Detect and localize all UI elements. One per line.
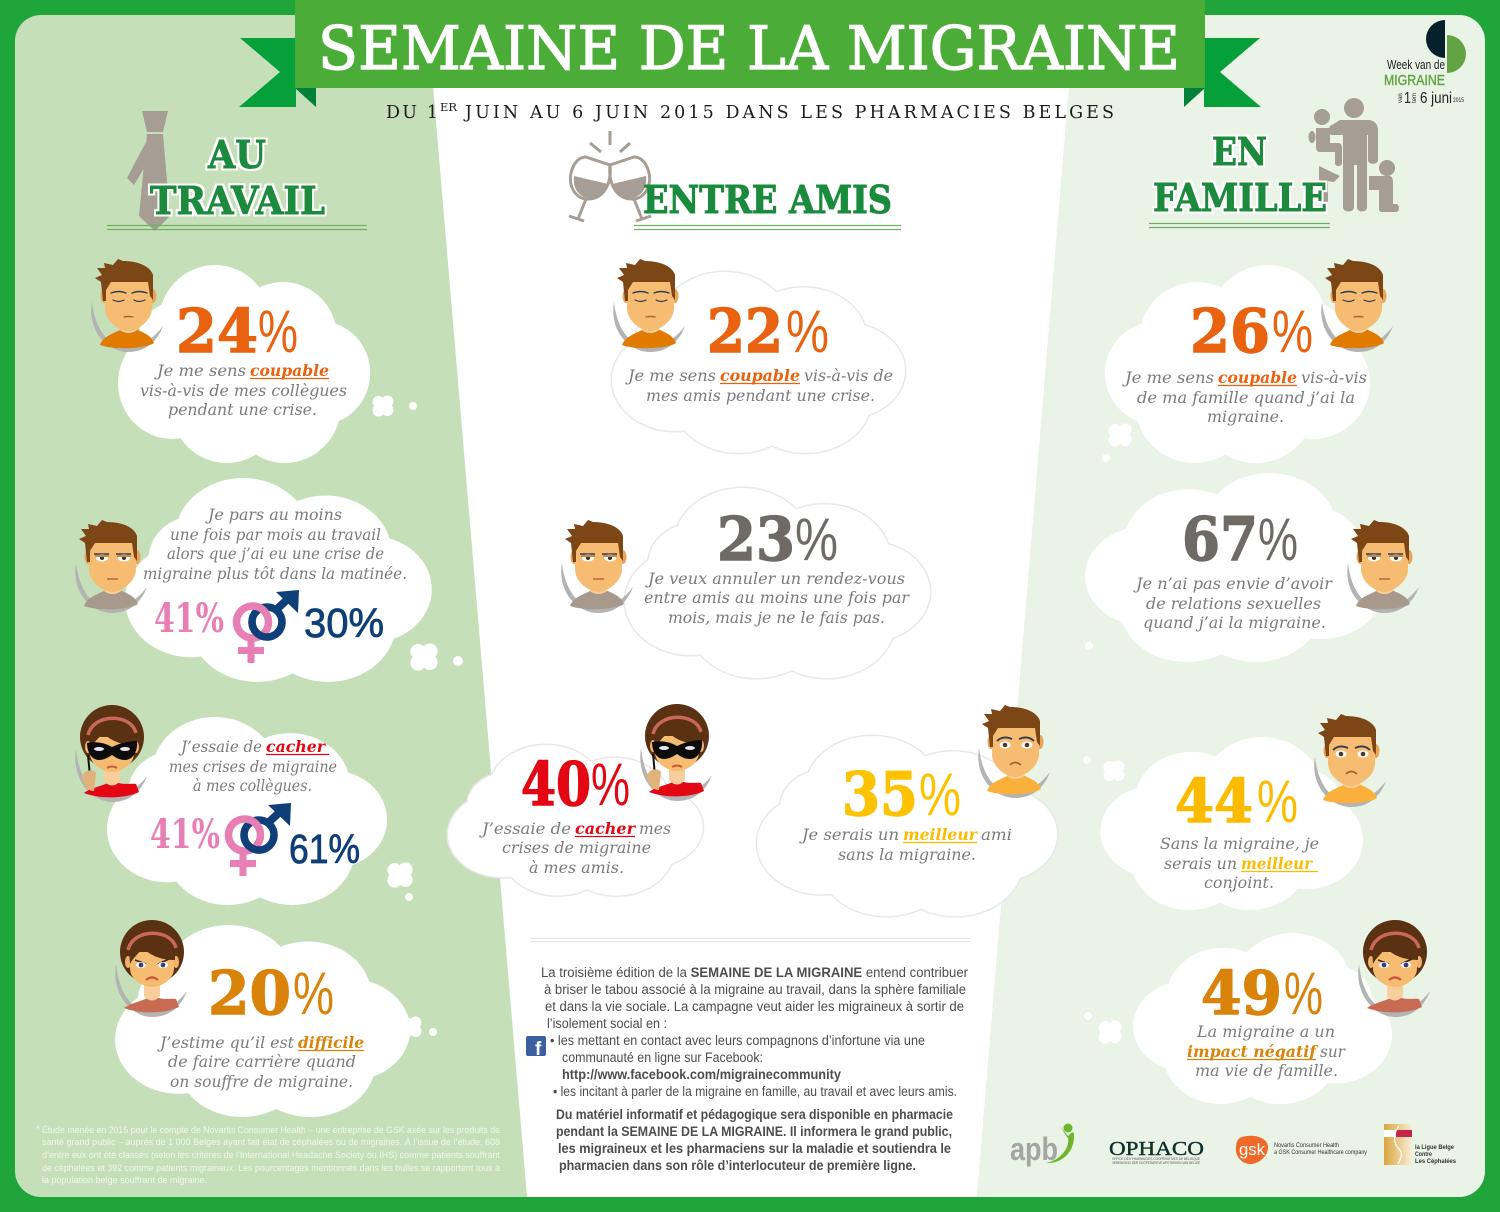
- bubble: 24% coupable collègues: coupable: [250, 361, 329, 380]
- bubble: 44% meilleur conjoint: 44: [1175, 767, 1253, 837]
- icon: facebook: f: [535, 1039, 542, 1060]
- bubble: 40% cacher amis: J’essaie de: [479, 819, 571, 838]
- icon: wine glasses: [569, 131, 651, 221]
- bubble: 40% cacher amis: [448, 704, 712, 895]
- logo: week van de migraine: van: [1398, 93, 1404, 103]
- bubble: 44% meilleur conjoint: %: [1257, 768, 1298, 835]
- heading: en famille: EN: [1212, 129, 1267, 174]
- bubble: 35% meilleur ami: [757, 705, 1057, 916]
- bubble: 35% meilleur ami: sans la migraine.: [838, 845, 976, 864]
- bubble: 44% meilleur conjoint: [1083, 714, 1386, 910]
- bubble: 23% annuler rendez-vous: 23: [717, 505, 795, 575]
- bubble: 23% annuler rendez-vous: mois, mais je ne le fais pas.: [668, 608, 885, 627]
- bubble: 49% impact négatif: La migraine a un: [1196, 1022, 1335, 1041]
- bubble: 26% coupable famille: [1102, 259, 1393, 463]
- text block: campaign description: l’isolement social en :: [547, 1016, 667, 1031]
- bubble: j'essaie de cacher collègues 41% 61%: mes crises de migraine: [169, 757, 337, 776]
- bubble: j'essaie de cacher collègues 41% 61%: [75, 705, 413, 905]
- bubble: 24% coupable collègues: vis-à-vis de mes collègues: [140, 381, 347, 400]
- footnote: *: [36, 1124, 40, 1135]
- text block: campaign description: • les mettant en contact avec leurs compagnons d’infortune via une: [550, 1033, 925, 1048]
- bubble: 22% coupable amis: coupable: [720, 366, 800, 385]
- heading: au travail: [107, 132, 367, 230]
- logo: gsk novartis: [1236, 1136, 1367, 1164]
- subtitle dates: ER: [440, 101, 458, 114]
- logo: la ligue belge contre les céphalées: la Ligue Belge: [1415, 1145, 1455, 1151]
- bubble: 20% difficile carrière: 20: [208, 959, 291, 1029]
- bubble: 44% meilleur conjoint: Sans la migraine, je: [1160, 834, 1319, 853]
- bubble: 22% coupable amis: [612, 259, 905, 453]
- logo: ophaco: OPHACO: [1109, 1138, 1204, 1160]
- bubble: 40% cacher amis: %: [591, 751, 630, 818]
- text block: campaign description: http://www.facebook.com/migrainecommunity: [562, 1067, 841, 1082]
- bubble: 20% difficile carrière: de faire carrière quand: [168, 1052, 356, 1071]
- bubble: je pars au travail 41% 30%: une fois par mois au travail: [170, 525, 381, 544]
- logo: ophaco: OFFICE DES PHARMACIES COOPÉRATIVES DE BELGIQUE: [1112, 1156, 1201, 1161]
- bubble: 20% difficile carrière: on souffre de migraine.: [170, 1072, 353, 1091]
- bubble: 23% annuler rendez-vous: %: [795, 506, 838, 573]
- logo: week van de migraine: 2015: [1453, 98, 1465, 104]
- bubble: 44% meilleur conjoint: serais un: [1164, 854, 1237, 873]
- bubble: 26% coupable famille: de ma famille quand j’ai la: [1137, 388, 1355, 407]
- heading: au travail: AU: [207, 132, 266, 177]
- bubble: 49% impact négatif: ma vie de famille.: [1195, 1061, 1338, 1080]
- logo: gsk novartis: gsk: [1239, 1140, 1265, 1159]
- text block: campaign description: La troisième édition de la SEMAINE DE LA MIGRAINE entend contribuer: [541, 965, 968, 980]
- text block: campaign description: et dans la vie sociale. La campagne veut aider les migraineux à sortir de: [545, 999, 964, 1014]
- bubble: 67% relations sexuelles: quand j’ai la migraine.: [1143, 613, 1326, 632]
- bubble: 67% relations sexuelles: [1085, 473, 1419, 662]
- footnote: d’entre eux ont été classés (selon les critères de l’International Headache Society ou IHS) comme patients souffrant: [42, 1150, 500, 1161]
- bubble: 20% difficile carrière: J’estime qu’il est: [157, 1033, 295, 1052]
- bubble: 24% coupable collègues: [91, 259, 417, 463]
- heading: en famille: [1149, 129, 1330, 228]
- heading: en famille: FAMILLE: [1153, 175, 1327, 220]
- logo: ophaco: VERENIGING DER COÖPERATIEVE APOTHEKEN VAN BELGIË: [1112, 1161, 1201, 1165]
- bubble: 49% impact négatif: sur: [1320, 1042, 1346, 1061]
- bubble: je pars au travail 41% 30%: [75, 478, 463, 682]
- title banner: SEMAINE DE LA MIGRAINE: [318, 14, 1180, 84]
- bubble: 67% relations sexuelles: Je n’ai pas envie d’avoir: [1133, 574, 1333, 593]
- bubble: 49% impact négatif: 49: [1201, 959, 1282, 1029]
- bubble: 35% meilleur ami: %: [919, 761, 961, 828]
- bubble: 40% cacher amis: crises de migraine: [502, 838, 651, 857]
- bubble: 26% coupable famille: migraine.: [1207, 407, 1284, 426]
- bubble: 20% difficile carrière: difficile: [298, 1033, 364, 1052]
- footnote: Étude menée en 2015 pour le compte de Novartis Consumer Health – une entreprise de GSK axée sur les produits de: [42, 1125, 500, 1136]
- bubble: 44% meilleur conjoint: meilleur: [1241, 854, 1313, 873]
- bubble: 22% coupable amis: vis-à-vis de: [804, 366, 893, 385]
- bubble: 35% meilleur ami: 35: [842, 760, 918, 830]
- bubble: j'essaie de cacher collègues 41% 61%: cacher: [266, 737, 327, 756]
- bubble: 49% impact négatif: %: [1284, 960, 1323, 1027]
- text block: campaign description: communauté en ligne sur Facebook:: [562, 1050, 763, 1065]
- footnote: [36, 1124, 501, 1186]
- bubble: 26% coupable famille: Je me sens: [1122, 368, 1214, 387]
- bubble: 23% annuler rendez-vous: [561, 488, 930, 678]
- bubble: 67% relations sexuelles: de relations sexuelles: [1146, 594, 1321, 613]
- bubble: 49% impact négatif: impact négatif: [1187, 1042, 1319, 1061]
- bubble: 35% meilleur ami: meilleur: [903, 825, 979, 844]
- text block: campaign description: pendant la SEMAINE DE LA MIGRAINE. Il informera le grand public,: [556, 1124, 952, 1139]
- bubble: je pars au travail 41% 30%: 41%: [154, 595, 224, 642]
- bubble: 49% impact négatif: [1084, 920, 1430, 1104]
- bubble: 67% relations sexuelles: %: [1258, 506, 1298, 573]
- icon: family: [1308, 98, 1399, 212]
- bubble: 20% difficile carrière: [115, 920, 437, 1117]
- bubble: je pars au travail 41% 30%: 30%: [304, 600, 384, 646]
- bubble: 44% meilleur conjoint: conjoint.: [1204, 873, 1274, 892]
- text block: campaign description: Du matériel informatif et pédagogique sera disponible en pharmacie: [556, 1107, 953, 1122]
- bubble: 24% coupable collègues: 24: [176, 297, 258, 367]
- bubble: 26% coupable famille: coupable: [1218, 368, 1297, 387]
- bubble: j'essaie de cacher collègues 41% 61%: à mes collègues.: [193, 776, 312, 795]
- bubble: 23% annuler rendez-vous: Je veux annuler un rendez-vous: [645, 569, 905, 588]
- bubble: 26% coupable famille: %: [1272, 298, 1313, 365]
- text block: campaign description: • les incitant à parler de la migraine en famille, au travail et avec leurs amis.: [553, 1084, 957, 1099]
- logo: la ligue belge contre les céphalées: Les Céphalées: [1415, 1159, 1457, 1165]
- bubble: j'essaie de cacher collègues 41% 61%: J’essaie de: [178, 737, 262, 756]
- title banner: [239, 0, 1261, 107]
- bubble: je pars au travail 41% 30%: Je pars au moins: [205, 505, 342, 524]
- bubble: 20% difficile carrière: %: [293, 960, 334, 1027]
- logo: gsk novartis: a GSK Consumer Healthcare company: [1274, 1150, 1367, 1156]
- bubble: 24% coupable collègues: %: [258, 298, 298, 365]
- logo: gsk novartis: Novartis Consumer Health: [1274, 1143, 1339, 1149]
- heading: au travail: TRAVAIL: [150, 178, 325, 223]
- bubble: 40% cacher amis: 40: [521, 750, 591, 820]
- icon: tie: [127, 111, 170, 231]
- bubble: je pars au travail 41% 30%: migraine plus tôt dans la matinée.: [143, 564, 407, 583]
- text block: campaign description: pharmacien dans son rôle d’interlocuteur de première ligne.: [559, 1158, 916, 1173]
- bubble: 40% cacher amis: à mes amis.: [529, 858, 624, 877]
- bubble: 24% coupable collègues: Je me sens: [154, 361, 246, 380]
- bubble: 22% coupable amis: Je me sens: [625, 366, 716, 385]
- logo: week van de migraine: [1384, 20, 1466, 107]
- bubble: 40% cacher amis: cacher: [575, 819, 637, 838]
- bubble: 22% coupable amis: 22: [707, 297, 783, 367]
- bubble: 24% coupable collègues: pendant une crise.: [168, 400, 317, 419]
- bubble: je pars au travail 41% 30%: alors que j’ai eu une crise de: [167, 544, 384, 563]
- bubble: 67% relations sexuelles: 67: [1182, 505, 1258, 575]
- text block: campaign description: les migraineux et les pharmaciens sur la maladie et soutiendra le: [558, 1141, 951, 1156]
- icon: facebook: [526, 1036, 546, 1060]
- bubble: 35% meilleur ami: Je serais un: [799, 825, 899, 844]
- logo: la ligue belge contre les céphalées: [1384, 1124, 1457, 1165]
- bubble: 22% coupable amis: %: [786, 298, 829, 365]
- logo: week van de migraine: 6 juni: [1420, 90, 1452, 107]
- bubble: 26% coupable famille: 26: [1190, 297, 1270, 367]
- bubble: 35% meilleur ami: ami: [981, 825, 1012, 844]
- bubble: 26% coupable famille: vis-à-vis: [1301, 368, 1367, 387]
- footnote: de céphalées et 392 comme patients migraineux. Les pourcentages mentionnés dans les bulles se rapportent tous à: [42, 1163, 501, 1174]
- bubble: j'essaie de cacher collègues 41% 61%: 61%: [289, 826, 360, 872]
- subtitle dates: JUIN AU 6 JUIN 2015 DANS LES PHARMACIES BELGES: [463, 103, 1114, 123]
- bubble: 40% cacher amis: mes: [639, 819, 671, 838]
- logo: week van de migraine: tem: [1412, 93, 1418, 103]
- subtitle dates: DU 1: [386, 103, 438, 123]
- footnote: santé grand public – auprès de 1 000 Belges ayant fait état de céphalées ou de migraines. À l’issue de l’étude, 608: [42, 1137, 500, 1148]
- heading: entre amis: ENTRE AMIS: [643, 177, 892, 222]
- bubble: 22% coupable amis: mes amis pendant une crise.: [646, 386, 875, 405]
- bubble: j'essaie de cacher collègues 41% 61%: 41%: [150, 811, 220, 858]
- text block: campaign description: [530, 938, 970, 1173]
- logo: week van de migraine: MIGRAINE: [1384, 72, 1445, 89]
- logo: week van de migraine: Week van de: [1387, 57, 1445, 72]
- bubble: 23% annuler rendez-vous: entre amis au moins une fois par: [644, 588, 910, 607]
- logo: apb: apb: [1010, 1131, 1058, 1167]
- logo: week van de migraine: 1: [1404, 90, 1411, 107]
- footnote: la population belge souffrant de migraine.: [42, 1175, 207, 1186]
- text block: campaign description: à briser le tabou associé à la migraine au travail, dans la sphère familiale: [544, 982, 966, 997]
- logo: la ligue belge contre les céphalées: Contre: [1415, 1152, 1433, 1158]
